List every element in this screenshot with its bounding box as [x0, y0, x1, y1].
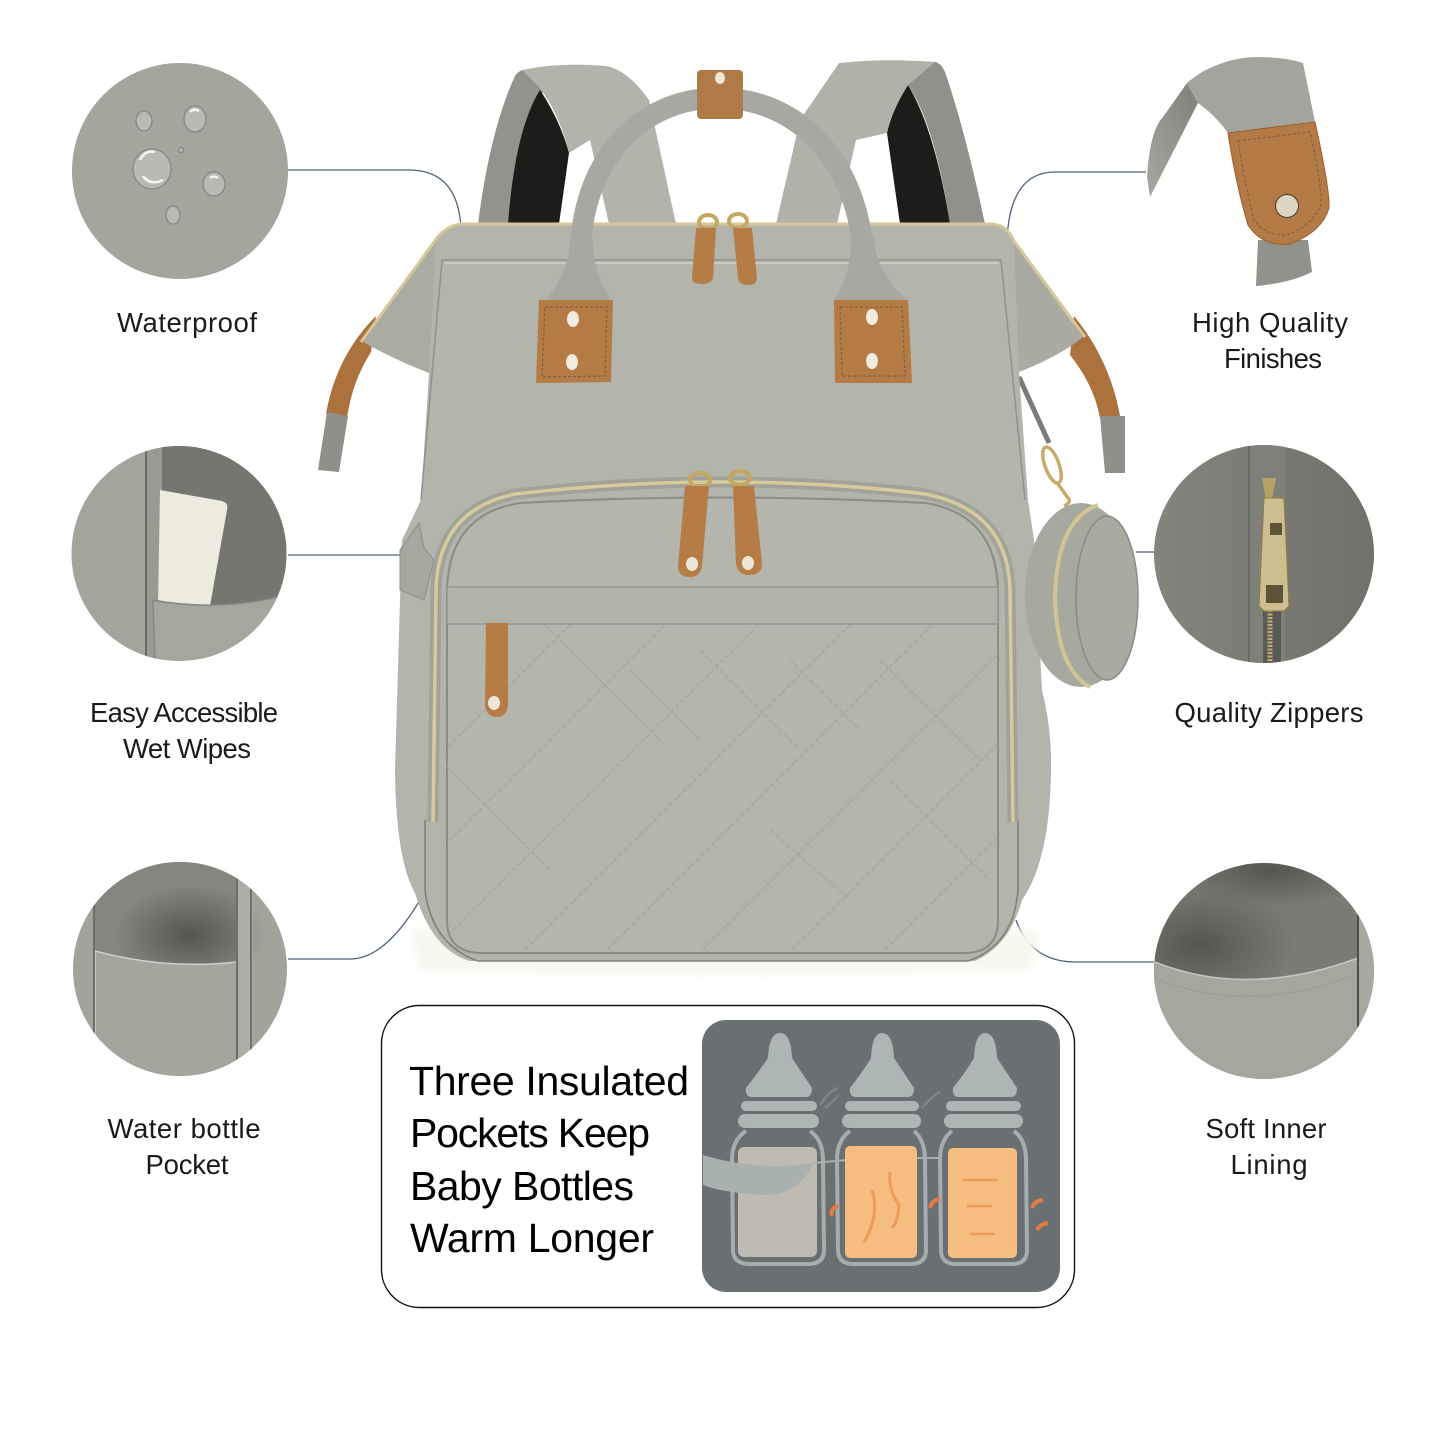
callout heading: Baby Bottles [410, 1163, 634, 1209]
wing panels [363, 224, 461, 373]
bottle 1 [703, 1033, 847, 1264]
quilting [447, 624, 998, 950]
leather handle patches [536, 300, 912, 383]
front zipper pulls [485, 471, 762, 717]
detail: quality zippers [1150, 440, 1378, 670]
label: soft inner lining [1206, 1113, 1326, 1180]
label: high quality finishes: High Quality [1192, 307, 1348, 338]
top zipper pulls [692, 214, 757, 285]
label: water bottle pocket: Water bottle [108, 1113, 260, 1144]
icon: heat marks [832, 1199, 1048, 1230]
callout heading: Warm Longer [410, 1215, 654, 1261]
callout heading [409, 1058, 689, 1261]
bottle 3 [940, 1033, 1027, 1264]
label: soft inner lining: Lining [1230, 1149, 1308, 1180]
side straps [318, 316, 1125, 473]
bottle 2 [837, 1033, 940, 1264]
top handle [545, 70, 908, 301]
bottle illustration panel [702, 1020, 1060, 1292]
detail: waterproof [72, 63, 288, 279]
front pocket [447, 498, 998, 953]
label: soft inner lining: Soft Inner [1206, 1113, 1326, 1144]
label: wet wipes: Easy Accessible [90, 697, 278, 728]
bag outer bottom seams [425, 820, 1018, 961]
detail: water bottle pocket [70, 860, 290, 1080]
pacifier pouch [1025, 445, 1138, 687]
left shoulder strap [478, 65, 676, 224]
side pocket band [400, 523, 434, 600]
label: quality zippers: Quality Zippers [1174, 697, 1364, 728]
label: water bottle pocket: Pocket [146, 1149, 229, 1180]
label: water bottle pocket [108, 1113, 260, 1180]
label: waterproof: Waterproof [117, 307, 257, 338]
icon: water drops [133, 106, 225, 224]
label: wet wipes [90, 697, 278, 764]
callout: insulated pockets [382, 1006, 1074, 1308]
pocket band [447, 587, 998, 624]
label: high quality finishes: Finishes [1224, 343, 1322, 374]
connector lines [288, 170, 1155, 962]
right shoulder strap [776, 60, 985, 224]
floor shadow [410, 930, 1040, 974]
callout heading: Three Insulated [409, 1058, 689, 1104]
main body [395, 224, 1051, 961]
detail: wet wipes pocket [70, 445, 290, 665]
label: high quality finishes [1192, 307, 1348, 374]
label: wet wipes: Wet Wipes [123, 733, 251, 764]
callout heading: Pockets Keep [410, 1110, 650, 1156]
backpack illustration [318, 60, 1139, 974]
detail: soft inner lining [1154, 863, 1374, 1079]
detail: high quality finishes [1147, 57, 1329, 286]
front pocket zipper [433, 482, 1013, 822]
